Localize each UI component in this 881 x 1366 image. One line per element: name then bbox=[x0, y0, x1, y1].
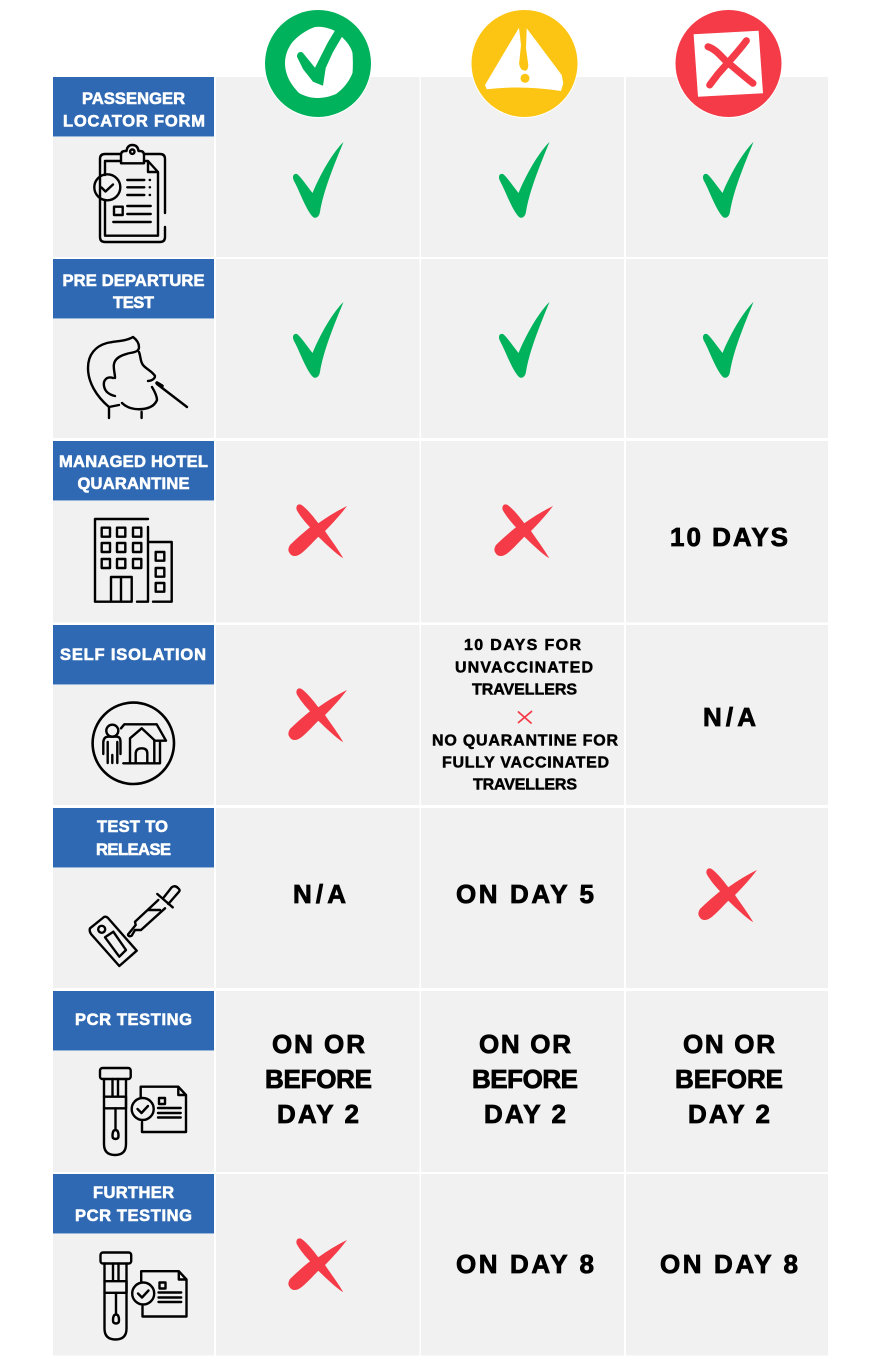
icon: test cassette and dropper bbox=[90, 886, 180, 966]
row: passenger locator form bbox=[53, 77, 754, 242]
label: further pcr testing: FURTHER bbox=[93, 1184, 174, 1202]
icon: hotel building bbox=[95, 519, 172, 602]
label: managed hotel quarantine: MANAGED HOTEL bbox=[59, 453, 208, 471]
value: not applicable: N/A bbox=[703, 702, 756, 732]
value: 10 days: 10 DAYS bbox=[670, 522, 788, 552]
icon: green status badge bbox=[264, 9, 372, 118]
value: red list on day 8: ON DAY 8 bbox=[660, 1249, 798, 1279]
icon: test tube and report bbox=[100, 1068, 186, 1155]
value: green list pcr timing bbox=[265, 1029, 372, 1129]
text block: amber list self isolation: TRAVELLERS bbox=[473, 776, 577, 794]
cross: green list bbox=[288, 688, 347, 742]
text block: amber list self isolation: NO QUARANTINE FOR bbox=[432, 732, 618, 750]
value: amber list on day 8: ON DAY 8 bbox=[456, 1249, 594, 1279]
text block: amber list self isolation: TRAVELLERS bbox=[472, 682, 577, 698]
text block: amber list self isolation: 10 DAYS FOR bbox=[464, 637, 581, 654]
value: amber list pcr timing bbox=[472, 1029, 578, 1129]
icon: red cross badge bbox=[674, 9, 782, 118]
value: on day 5: ON DAY 5 bbox=[456, 879, 594, 909]
tick: green list bbox=[293, 302, 344, 378]
icon: yellow warning badge bbox=[470, 9, 578, 118]
label: pcr testing bbox=[53, 991, 214, 1050]
row: self isolation bbox=[53, 625, 756, 794]
cross: small separator bbox=[518, 712, 532, 723]
tick: red list bbox=[703, 302, 754, 378]
label: test to release: RELEASE bbox=[96, 841, 171, 859]
row: further pcr testing bbox=[53, 1174, 798, 1340]
label: passenger locator form bbox=[53, 77, 214, 136]
value: green list pcr timing: ON OR bbox=[272, 1029, 365, 1059]
value: red list pcr timing: ON OR bbox=[683, 1029, 775, 1059]
text block: amber list self isolation: UNVACCINATED bbox=[455, 660, 593, 676]
value: red list pcr timing: DAY 2 bbox=[688, 1099, 770, 1129]
text block: amber list self isolation bbox=[432, 637, 618, 794]
cross: green list bbox=[288, 504, 347, 558]
label: pcr testing: PCR TESTING bbox=[75, 1011, 192, 1029]
value: green list pcr timing: BEFORE bbox=[265, 1064, 372, 1094]
cross: green list bbox=[288, 1238, 347, 1292]
label: pre departure test: TEST bbox=[113, 294, 154, 312]
row: pre departure test bbox=[53, 259, 754, 418]
value: red list pcr timing: BEFORE bbox=[675, 1064, 783, 1094]
label: managed hotel quarantine bbox=[53, 441, 214, 500]
row: pcr testing bbox=[53, 991, 783, 1155]
icon: clipboard bbox=[94, 145, 165, 242]
label: passenger locator form: LOCATOR FORM bbox=[63, 112, 205, 130]
label: self isolation bbox=[53, 625, 214, 684]
value: not applicable: N/A bbox=[293, 879, 346, 909]
icon: nasal swab bbox=[88, 337, 187, 418]
label: pre departure test: PRE DEPARTURE bbox=[62, 272, 204, 290]
value: amber list pcr timing: DAY 2 bbox=[484, 1099, 566, 1129]
value: amber list pcr timing: ON OR bbox=[479, 1029, 571, 1059]
value: green list pcr timing: DAY 2 bbox=[277, 1099, 359, 1129]
row: test to release bbox=[53, 808, 757, 966]
icon: test tube and report bbox=[100, 1252, 186, 1340]
label: further pcr testing: PCR TESTING bbox=[75, 1207, 192, 1225]
label: further pcr testing bbox=[53, 1174, 214, 1234]
cross: amber list bbox=[494, 504, 553, 558]
tick: red list bbox=[703, 142, 754, 218]
value: amber list pcr timing: BEFORE bbox=[472, 1064, 578, 1094]
label: passenger locator form: PASSENGER bbox=[82, 90, 185, 108]
tick: amber list bbox=[499, 302, 550, 378]
label: test to release: TEST TO bbox=[97, 818, 168, 836]
exclamation dot bbox=[520, 74, 530, 83]
row: managed hotel quarantine bbox=[53, 441, 788, 602]
cross: red list bbox=[698, 868, 757, 922]
value: red list pcr timing bbox=[675, 1029, 783, 1129]
tick: amber list bbox=[499, 142, 550, 218]
icon: person and house in circle bbox=[93, 703, 174, 784]
label: self isolation: SELF ISOLATION bbox=[60, 646, 206, 664]
text block: amber list self isolation: FULLY VACCINATED bbox=[442, 754, 609, 772]
label: test to release bbox=[53, 808, 214, 868]
label: managed hotel quarantine: QUARANTINE bbox=[78, 475, 190, 493]
label: pre departure test bbox=[53, 259, 214, 318]
tick: green list bbox=[293, 142, 344, 218]
